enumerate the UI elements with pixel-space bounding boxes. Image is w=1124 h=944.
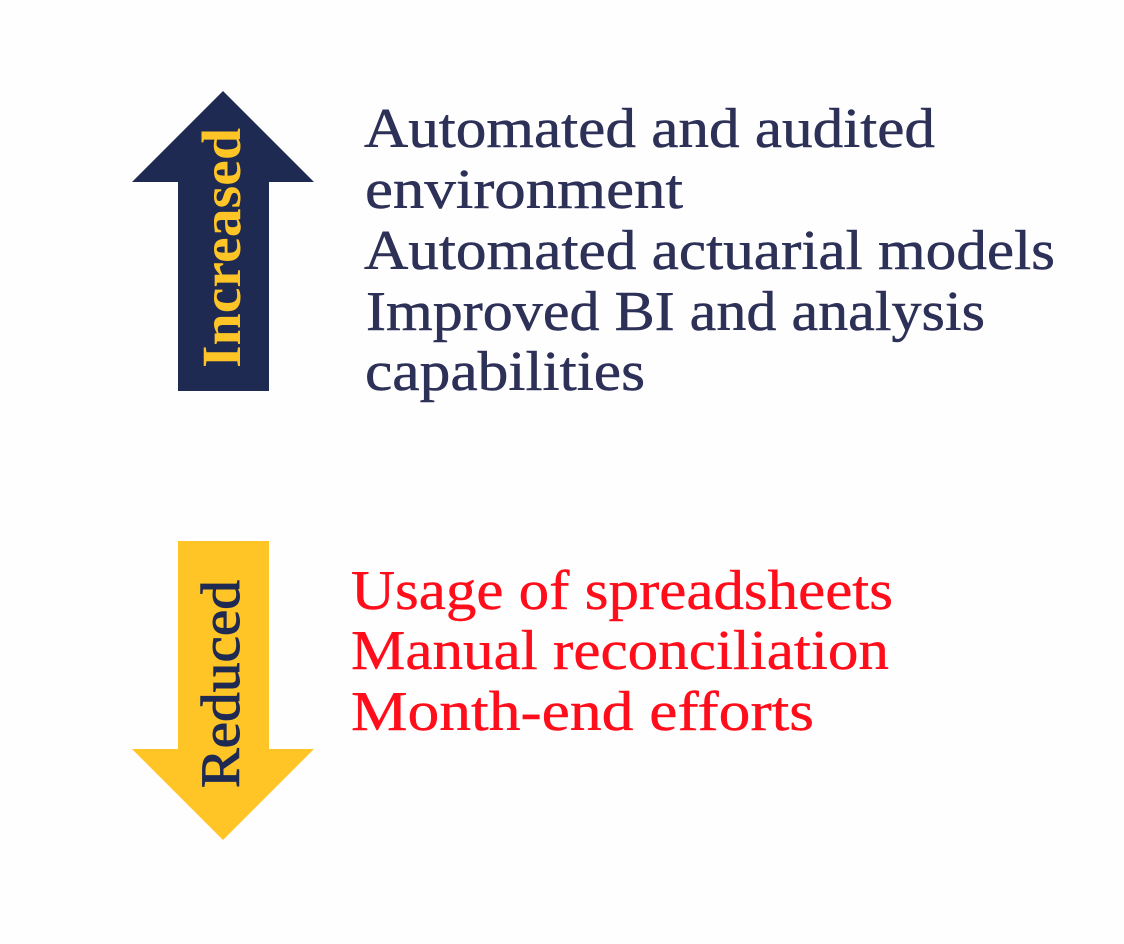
text block: reduced items: Usage of spreadsheets bbox=[351, 560, 893, 622]
text block: increased items: capabilities bbox=[365, 341, 645, 403]
text block: reduced items: Manual reconciliation bbox=[351, 620, 889, 682]
text block: reduced items bbox=[351, 560, 893, 743]
text block: reduced items: Month-end efforts bbox=[351, 681, 814, 743]
panel: increased bbox=[132, 91, 1055, 403]
panel: reduced bbox=[132, 541, 893, 840]
arrow: increased up arrow bbox=[132, 91, 314, 391]
text block: increased items bbox=[364, 98, 1055, 403]
text block: increased items: environment bbox=[365, 159, 683, 221]
arrow label: Reduced: Reduced bbox=[190, 580, 251, 788]
arrow label: Increased: Increased bbox=[191, 128, 252, 368]
text block: increased items: Improved BI and analysis bbox=[366, 281, 985, 343]
arrow: reduced down arrow bbox=[132, 541, 314, 840]
text block: increased items: Automated and audited bbox=[364, 98, 935, 160]
text block: increased items: Automated actuarial models bbox=[364, 220, 1055, 282]
